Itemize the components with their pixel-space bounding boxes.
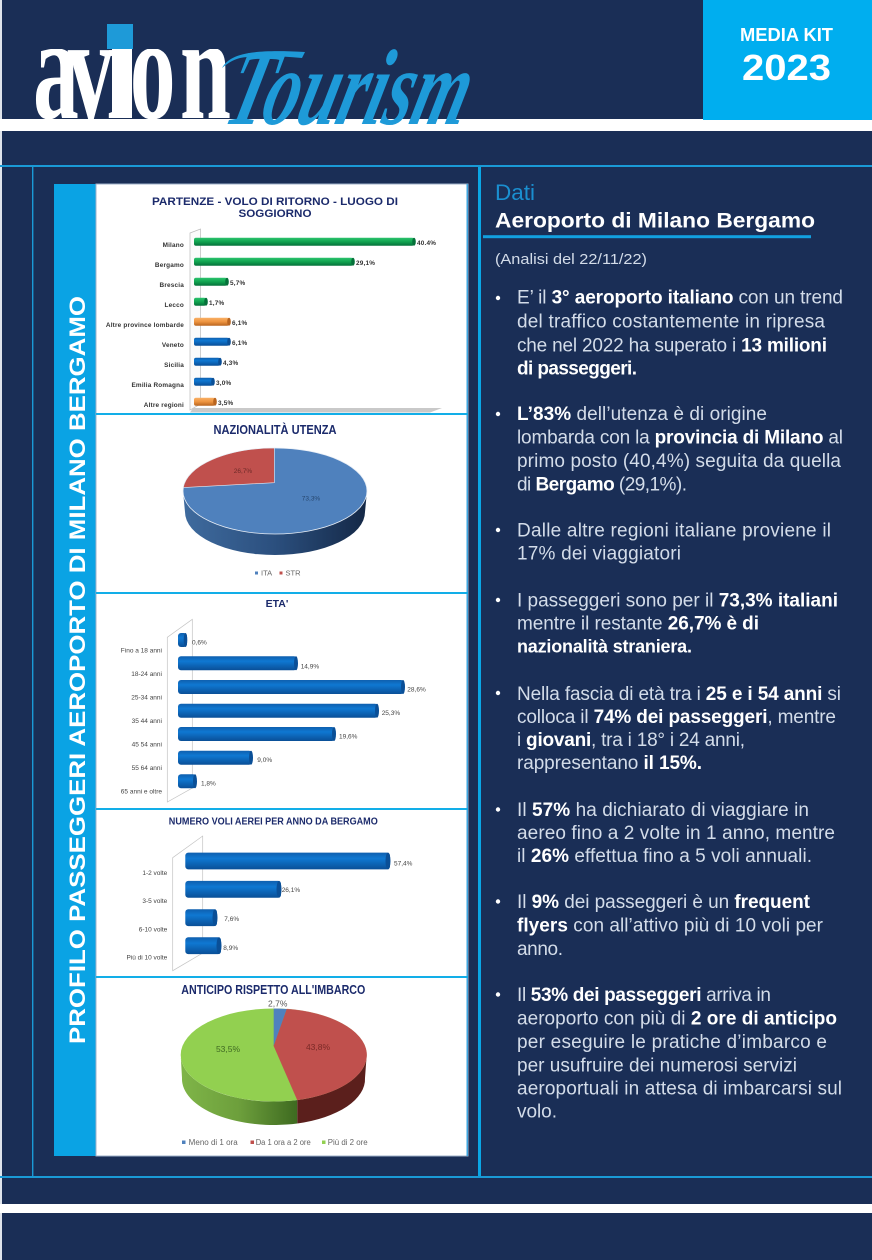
- legend: nazionalita: ITA: [261, 568, 272, 578]
- chart title: nazionalita: NAZIONALITÀ UTENZA: [214, 422, 336, 437]
- value labels: partenze: 29,1%: [356, 260, 375, 267]
- chart: numero voli aerei: [126, 816, 413, 971]
- chart title: eta: ETA': [266, 598, 288, 610]
- category labels: numero voli: 3-5 volte: [142, 898, 168, 905]
- category labels: numero voli: 6-10 volte: [139, 926, 168, 934]
- bars: partenze: [194, 238, 416, 406]
- bullet: origine lombarda: L’83% dell’utenza è di origine: [517, 404, 767, 425]
- heading: dati aeroporto: [483, 180, 815, 238]
- category labels: eta: 55 64 anni: [132, 765, 162, 772]
- chart: eta: [121, 598, 426, 802]
- category labels: eta: 45 54 anni: [132, 742, 162, 748]
- chart title: anticipo: ANTICIPO RISPETTO ALL'IMBARCO: [181, 983, 366, 997]
- bullet: origine lombarda: primo posto (40,4%) seguita da quella: [517, 451, 841, 472]
- category labels: partenze: [106, 242, 184, 409]
- bullet: nazionalita: mentre il restante 26,7% è di: [517, 614, 759, 634]
- value labels: eta: 9,0%: [257, 757, 272, 764]
- bullet: terzo aeroporto: di passeggeri.: [517, 358, 637, 380]
- legend: anticipo: Più di 2 ore: [328, 1138, 368, 1147]
- bullet: frequent flyers: anno.: [517, 939, 563, 960]
- chart: partenze luogo di soggiorno: [106, 196, 442, 412]
- vertical banner: profilo passeggeri: PROFILO PASSEGGERI AEROPORTO DI MILANO BERGAMO: [65, 296, 90, 1044]
- heading: dati aeroporto: Aeroporto di Milano Bergamo: [495, 210, 815, 232]
- value labels: partenze: 3,0%: [216, 380, 231, 387]
- category labels: partenze: Brescia: [160, 282, 184, 289]
- value labels: partenze: 40.4%: [417, 240, 436, 247]
- bars: eta: [178, 633, 405, 788]
- vertical banner: profilo passeggeri: [54, 184, 96, 1156]
- value labels: numero voli: 26,1%: [282, 887, 300, 894]
- bullet: origine lombarda: [496, 404, 843, 496]
- bars: numero voli: [185, 853, 390, 954]
- category labels: eta: 35 44 anni: [132, 718, 162, 725]
- heading: dati aeroporto: Dati: [495, 180, 535, 205]
- value labels: partenze: 1,7%: [209, 300, 224, 307]
- pie: anticipo: 53,5%: [216, 1044, 240, 1054]
- media kit badge: MEDIA KIT: [740, 25, 833, 45]
- value labels: eta: 28,6%: [407, 686, 426, 694]
- bullet: altre regioni: 17% dei viaggiatori: [517, 544, 681, 564]
- bullet: frequent flyers: [496, 892, 824, 960]
- bullet: fascia di eta: colloca il 74% dei passeggeri, mentre: [517, 707, 836, 728]
- bullet: frequenza di volo: [496, 800, 835, 867]
- value labels: partenze: [209, 240, 436, 407]
- bullet: frequenza di volo: aereo fino a 2 volte in 1 anno, mentre: [517, 823, 835, 844]
- value labels: partenze: 5,7%: [230, 280, 245, 287]
- pie: nazionalita: 73,3%: [302, 496, 320, 502]
- value labels: numero voli: 8,9%: [223, 945, 238, 952]
- chart: nazionalita utenza: [183, 422, 367, 578]
- media kit badge: 2023: [742, 47, 831, 88]
- value labels: numero voli: 7,6%: [224, 916, 239, 923]
- category labels: numero voli: [126, 870, 168, 962]
- bullet: anticipo in aeroporto: [496, 985, 842, 1122]
- white footer band: [0, 1204, 872, 1213]
- pie: anticipo: 43,8%: [306, 1042, 330, 1052]
- value labels: eta: [192, 640, 426, 788]
- bullet: origine lombarda: di Bergamo (29,1%).: [517, 474, 687, 496]
- legend: anticipo: Meno di 1 ora: [189, 1138, 238, 1147]
- category labels: partenze: Veneto: [162, 342, 184, 349]
- pie: anticipo: [181, 998, 367, 1125]
- white header band: [0, 119, 872, 131]
- logo: avion Tourism: Tourism: [215, 28, 488, 148]
- bullet: nazionalita: [496, 590, 838, 656]
- category labels: eta: 18-24 anni: [131, 671, 162, 678]
- bullet: anticipo in aeroporto: Il 53% dei passeggeri arriva in: [517, 985, 771, 1006]
- bullet: anticipo in aeroporto: aeroporto con più di 2 ore di anticipo: [517, 1008, 837, 1030]
- category labels: eta: 65 anni e oltre: [121, 788, 162, 796]
- chart title: numero voli: NUMERO VOLI AEREI PER ANNO DA BERGAMO: [169, 816, 378, 828]
- bullet: anticipo in aeroporto: volo.: [517, 1102, 557, 1122]
- bullet: terzo aeroporto: E’ il 3° aeroporto italiano con un trend: [517, 288, 843, 308]
- pie: anticipo: 2,7%: [268, 998, 288, 1008]
- bullet: terzo aeroporto: [496, 288, 843, 380]
- bullet: frequent flyers: flyers con all’attivo più di 10 voli per: [517, 916, 824, 936]
- analysis date: (Analisi del 22/11/22): [495, 251, 647, 268]
- bullet: terzo aeroporto: che nel 2022 ha superato i 13 milioni: [517, 336, 827, 356]
- value labels: numero voli: [223, 860, 413, 952]
- legend: nazionalita: STR: [286, 568, 301, 578]
- category labels: eta: Fino a 18 anni: [121, 648, 162, 654]
- chart title: partenze: [152, 196, 398, 220]
- pie: nazionalita: 26,7%: [234, 468, 252, 475]
- value labels: partenze: 6,1%: [232, 340, 247, 347]
- charts card: [96, 184, 468, 1156]
- bullet: frequenza di volo: il 26% effettua fino a 5 voli annuali.: [517, 846, 812, 867]
- value labels: eta: 14,9%: [301, 664, 319, 670]
- bullet: fascia di eta: [496, 684, 841, 774]
- left page edge: [0, 0, 2, 1260]
- chart title: partenze: SOGGIORNO: [238, 208, 312, 220]
- bullet: anticipo in aeroporto: per eseguire le pratiche d’imbarco e: [517, 1032, 827, 1053]
- category labels: partenze: Lecco: [165, 302, 184, 309]
- category labels: partenze: Altre province lombarde: [106, 322, 184, 329]
- bullet: nazionalita: I passeggeri sono per il 73,3% italiani: [517, 590, 838, 612]
- chart: anticipo rispetto all'imbarco: [181, 983, 368, 1147]
- bullet: nazionalita: nazionalità straniera.: [517, 636, 692, 656]
- category labels: partenze: Bergamo: [155, 262, 184, 269]
- bullet: altre regioni: Dalle altre regioni italiane proviene il: [517, 520, 831, 542]
- bullet: fascia di eta: i giovani, tra i 18° i 24 anni,: [517, 730, 745, 751]
- legend: anticipo: [182, 1138, 368, 1147]
- value labels: eta: 1,8%: [201, 780, 216, 788]
- legend: anticipo: Da 1 ora a 2 ore: [256, 1138, 311, 1147]
- chart title: partenze: PARTENZE - VOLO DI RITORNO - LUOGO DI: [152, 196, 398, 208]
- pie: nazionalita: [183, 448, 367, 555]
- bullet: anticipo in aeroporto: aeroportuali in attesa di imbarcarsi sul: [517, 1078, 842, 1100]
- category labels: eta: [121, 648, 162, 796]
- value labels: partenze: 3,5%: [218, 400, 233, 407]
- bullet: frequenza di volo: Il 57% ha dichiarato di viaggiare in: [517, 800, 809, 821]
- value labels: partenze: 6,1%: [232, 320, 247, 327]
- bullet: terzo aeroporto: del traffico costantemente in ripresa: [517, 312, 825, 332]
- category labels: partenze: Altre regioni: [144, 402, 184, 409]
- value labels: eta: 0,6%: [192, 640, 207, 646]
- bullet: altre regioni: [496, 520, 831, 564]
- category labels: eta: 25-34 anni: [131, 694, 162, 702]
- category labels: numero voli: 1-2 volte: [142, 870, 168, 877]
- category labels: partenze: Milano: [163, 242, 184, 249]
- value labels: numero voli: 57,4%: [394, 860, 413, 868]
- legend: nazionalita: [255, 568, 301, 578]
- logo: avion Tourism: [36, 24, 470, 126]
- category labels: partenze: Sicilia: [164, 362, 184, 369]
- value labels: eta: 19,6%: [339, 734, 358, 740]
- bullet: frequent flyers: Il 9% dei passeggeri è un frequent: [517, 892, 811, 913]
- value labels: partenze: 4,3%: [223, 360, 238, 367]
- bullet: anticipo in aeroporto: per usufruire dei numerosi servizi: [517, 1056, 797, 1076]
- value labels: eta: 25,3%: [382, 710, 400, 717]
- bullet: fascia di eta: rappresentano il 15%.: [517, 753, 702, 774]
- bullet: origine lombarda: lombarda con la provincia di Milano al: [517, 428, 843, 448]
- media kit badge: [703, 0, 872, 120]
- category labels: partenze: Emilia Romagna: [131, 382, 184, 389]
- bullet: fascia di eta: Nella fascia di età tra i 25 e i 54 anni si: [517, 684, 841, 705]
- category labels: numero voli: Più di 10 volte: [126, 954, 168, 962]
